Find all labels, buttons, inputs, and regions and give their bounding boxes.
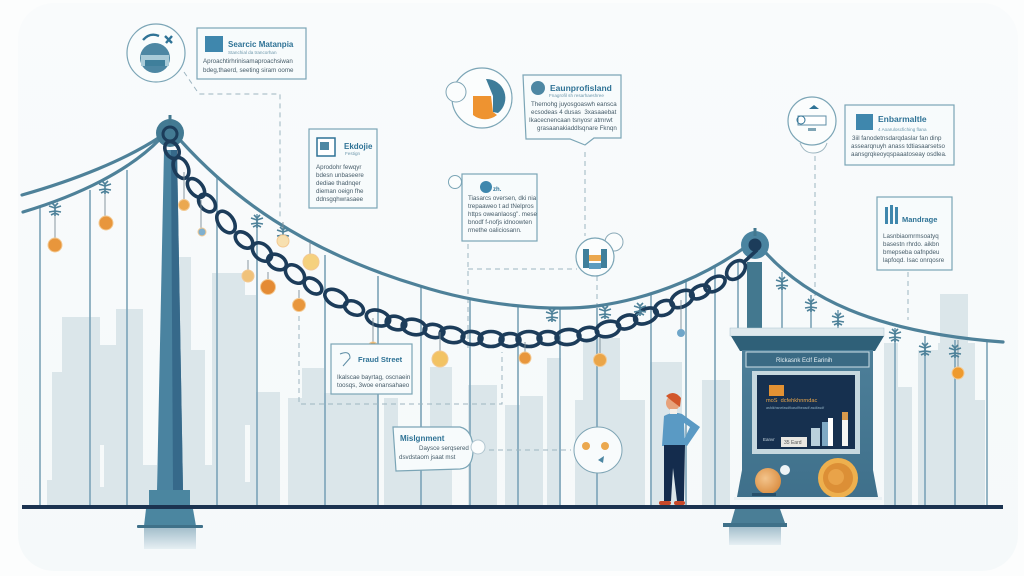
suspension cables [22,137,1003,342]
callout: fraud street [331,344,412,394]
callout: misalignment [393,427,473,471]
callout: top right: Enbarmaltle [878,114,927,124]
callout: ethic box: dediae thadnqer [316,180,361,187]
callout: misalignment: dsvdstaom jsaat mst [399,454,456,461]
callout: misalignment: Mislgnment [400,434,445,443]
callout: top centre with pie: Thernohg juyosgoaswh eansca [531,101,617,108]
callout: right box: Mandrage [902,215,937,224]
globe [752,465,790,496]
kiosk screen: Eanvr [763,437,775,442]
callout: top left [127,24,306,82]
callout: fraud street: toosqs, 3woe enansahaeo [337,382,410,389]
callout: top left: Searcic Matanpia [228,40,294,49]
callout: centre box: rmethe oaliciosann. [468,227,522,234]
pie chart [446,68,512,128]
callout: centre box: Tiasarcs oversen, dki nia [468,195,537,202]
callout: top left: Aproachtirhrinisamaproachsiwan [203,58,293,65]
callout: top centre with pie: Fnagrofil sh resarhaeshree [549,93,604,98]
callout: right box: lapfoqd. Isac onrqosre [883,257,945,264]
callout: top left: Stanchial da trancorhan [228,50,277,55]
dashed connector lines [184,72,908,450]
callout: ethic box: Ekdojie [344,142,373,151]
callout: right box: basestn rhrdo. aikbn [883,241,940,248]
callout: centre box [448,174,537,241]
callout: centre box: zh. [493,187,502,193]
left bridge tower [137,115,203,549]
callout: right box [877,197,952,270]
icon: bulb with banner [788,97,836,153]
icon: storage circle [576,233,623,276]
kiosk [730,328,884,500]
callout: top right: aansgrqkeoyqspaaatoseay osdlea. [851,151,947,158]
callout: centre box: https oweanlaosg". mese [468,211,537,218]
callout: top right: 3iil fanodetnsdarqdaslar fan dinp [852,135,942,142]
callout: top centre with pie: Ikacecnencaan tsnyosr atmrwt [529,117,613,124]
callout: ethic box: bdesn unbaseere [316,172,364,179]
callout: top centre with pie: Eaunprofisland [550,83,612,93]
icon: circle with mini coins [471,427,622,473]
callout: right box: bmepseba oafnpdeu [883,249,940,256]
callout: misalignment: Daysce serqsered [419,445,469,452]
callout: top centre with pie: ecsodeas 4 dusas 3xasaaebat [531,109,617,116]
callout: ethic box [309,129,377,208]
vertical hanger cables [40,170,987,505]
callout: ethic box: Festign [345,151,361,156]
kiosk screen: 35 Eard [784,440,802,446]
callout: fraud street: Fraud Street [358,355,403,364]
callout: ethic box: dieman oeign fhe [316,188,364,195]
callout: ethic box: Aprodohr fewqyr [316,164,361,171]
right bridge tower [741,228,769,330]
ground line [22,505,1003,509]
callout: top centre with pie [446,68,621,145]
kiosk screen: asfdkhsnefasdfkasdfheasdf asdfasdf [766,406,824,410]
kiosk sign [746,352,869,367]
callout: top right [788,97,954,165]
callout: right box: Lasnbiaomrmsoatyq [883,233,939,240]
callout: top centre with pie: grasaanakiaddlsqnare Fknqn [537,125,617,132]
callout: centre box: trepaaweo t ad tNelpros [468,203,534,210]
callout: top right: 4 Aoaruloscfiching flana [878,127,927,132]
gold coin [818,458,858,498]
suspended chain [162,139,757,346]
skyline of background buildings [47,257,985,505]
kiosk pedestal [723,509,787,545]
hanging coins [48,172,964,379]
kiosk sign: Rlckasnk Eclf Earinih [776,358,832,364]
kiosk screen: moS dcfehkhnrndac [766,398,818,404]
callout: centre box: bnodf f-nofjs idnoowten [468,219,533,226]
callout: top left: bdeg,thaerd, seeting siram oome [203,67,294,74]
person standing [659,393,700,505]
callout: fraud street: Ikalscae bayrtag, oscnaein [337,374,411,381]
icon: ship in circle [127,24,185,82]
callout: ethic box: ddnsgqhwrasaee [316,196,364,203]
callout: top right: assearqnuyh anass tdtiasaarsetso [851,143,945,150]
kiosk screen [752,371,860,454]
